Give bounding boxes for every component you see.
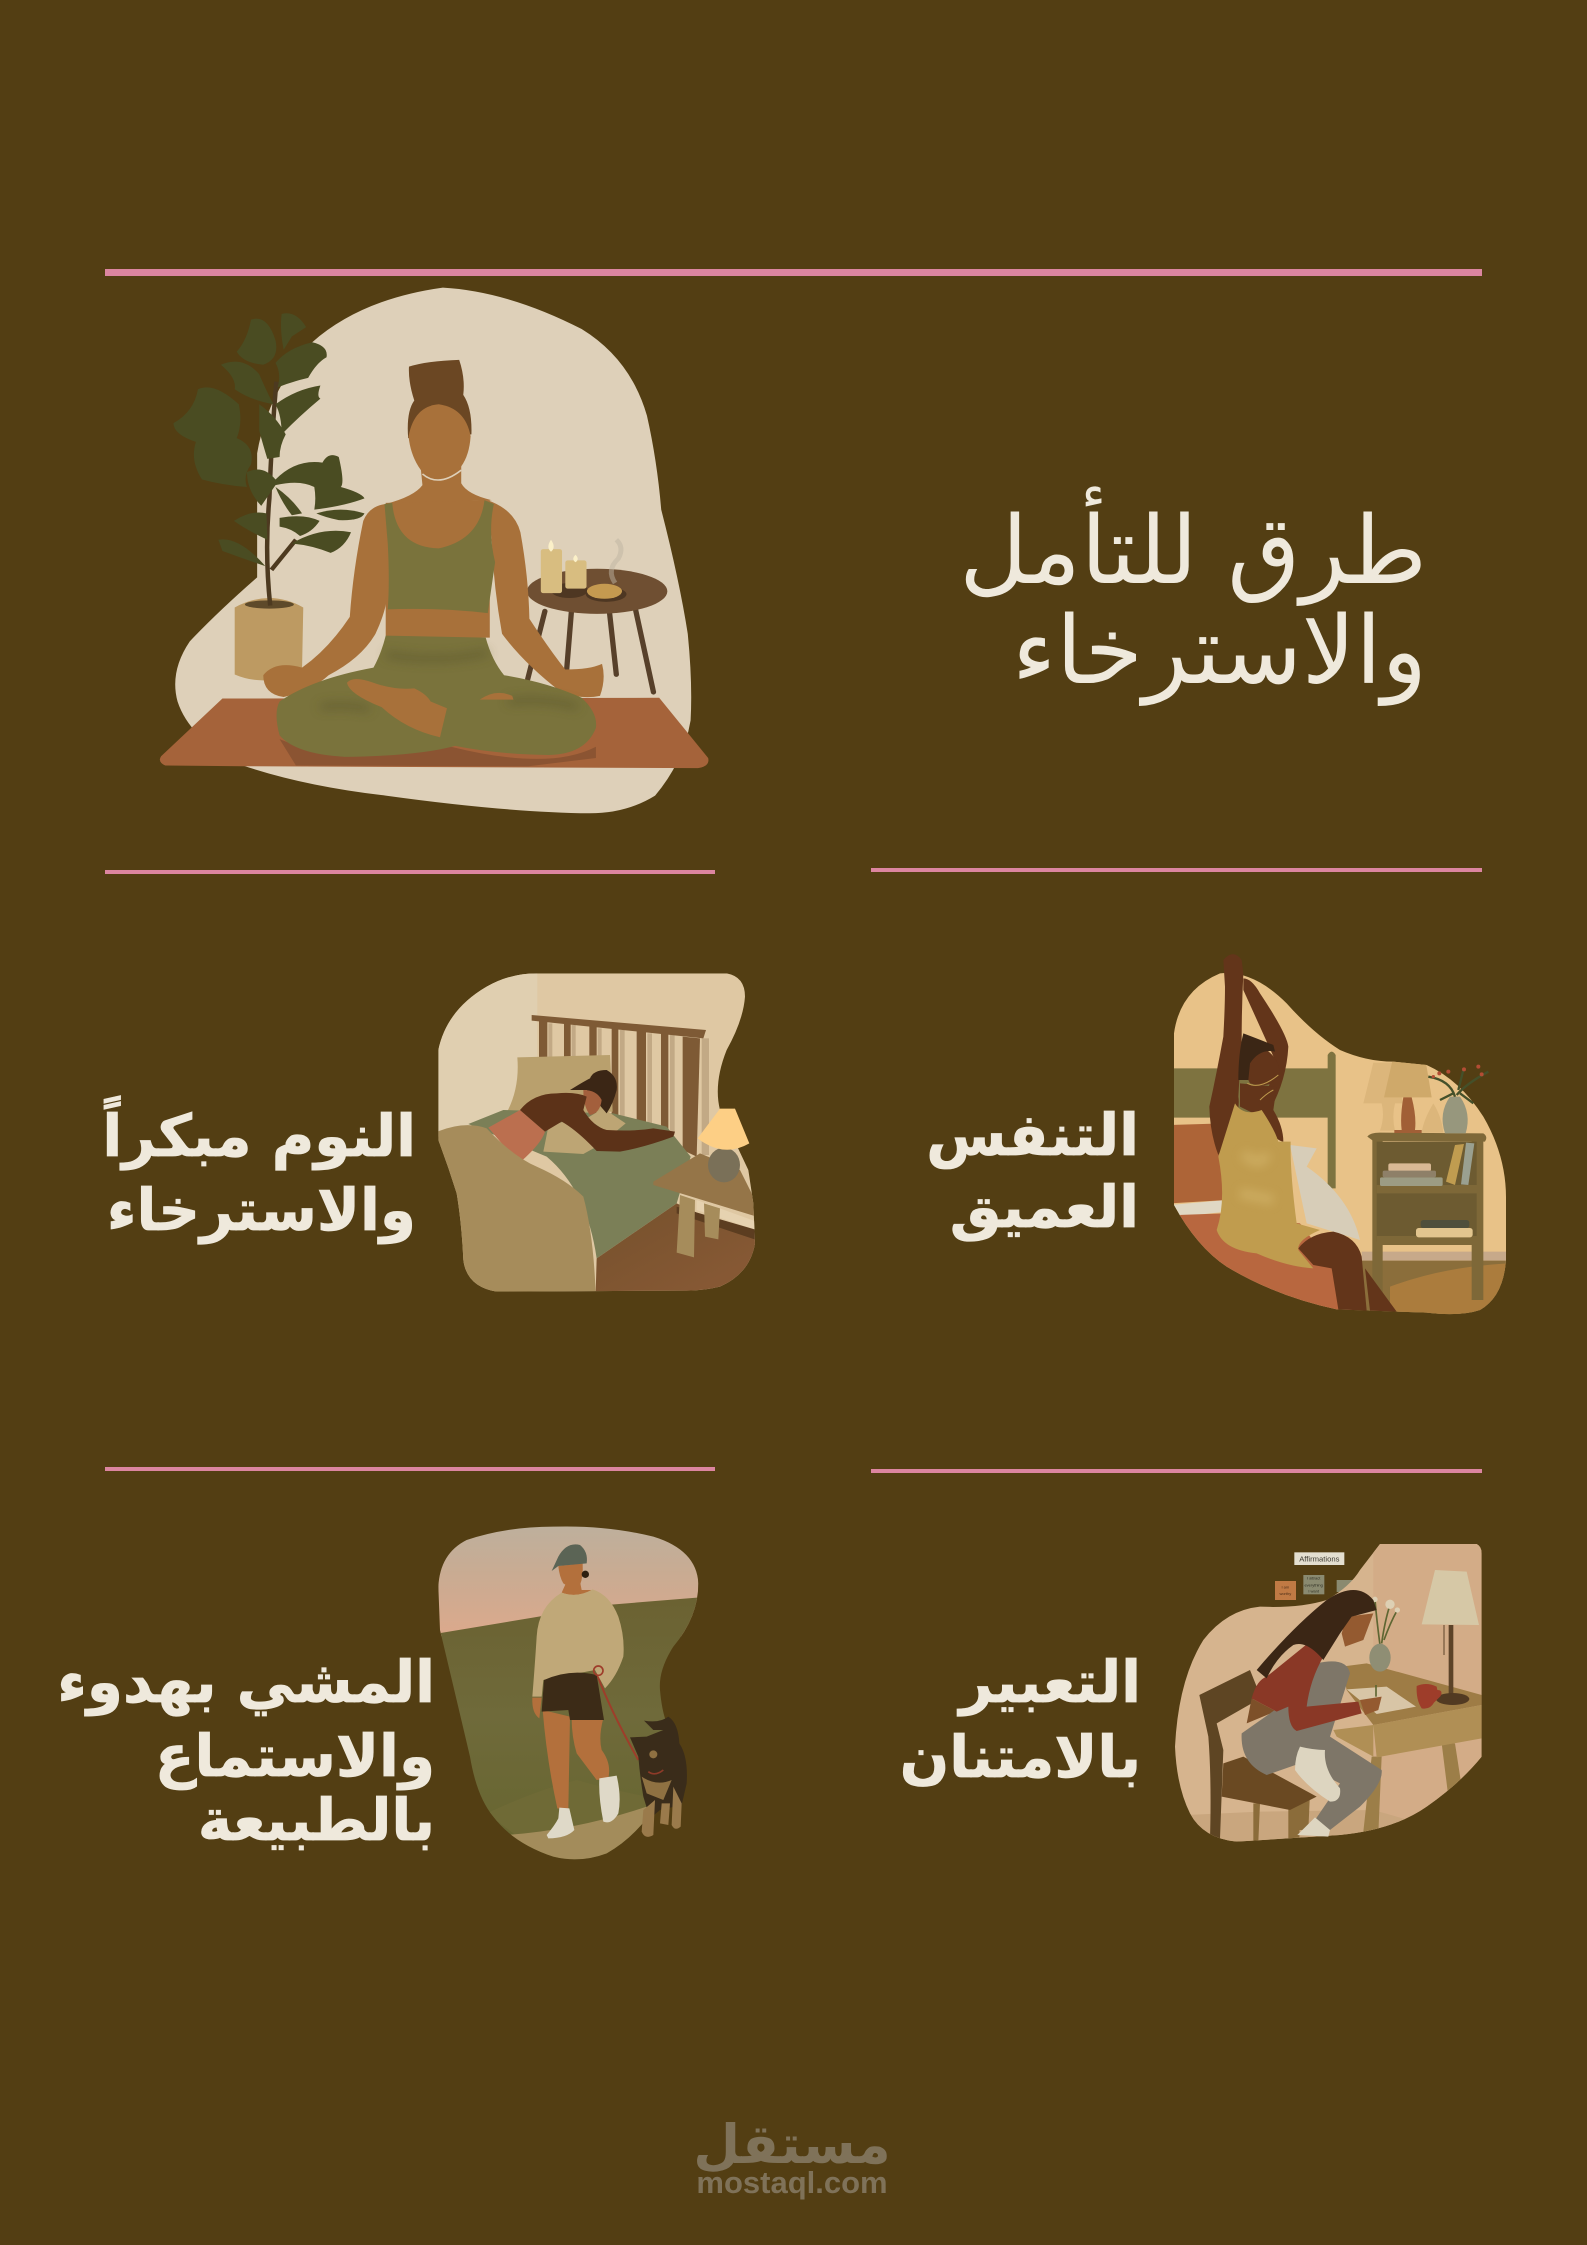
clipped bedroom scene xyxy=(1170,967,1510,1320)
top divider xyxy=(105,269,1482,276)
logo latin: mostaql.com xyxy=(696,2165,888,2200)
affirmations sign: Affirmations xyxy=(1299,1554,1340,1563)
divider: row 2 left xyxy=(105,870,715,874)
lamp xyxy=(698,1109,749,1182)
bed xyxy=(1174,1124,1222,1204)
logo arabic: مستقل xyxy=(693,2113,891,2176)
table lamp xyxy=(1384,1062,1432,1098)
face xyxy=(583,1090,602,1115)
leash xyxy=(597,1673,638,1760)
journaling woman xyxy=(1242,1590,1382,1837)
label: deep breathing xyxy=(926,1101,1139,1242)
open journal xyxy=(1347,1687,1416,1714)
camisole xyxy=(488,1110,545,1162)
clipped room scene xyxy=(1170,1540,1487,1850)
sticky notes: everything xyxy=(1304,1582,1323,1587)
plant pot xyxy=(235,598,303,680)
mostaql logo xyxy=(693,2113,891,2200)
line 1: التعبير xyxy=(956,1648,1141,1717)
table lamp shadow xyxy=(1363,1063,1443,1133)
small pillow xyxy=(588,1112,626,1130)
hair xyxy=(570,1070,617,1113)
affirmations sign xyxy=(1294,1552,1344,1565)
green sheet xyxy=(468,1110,691,1258)
illustration: woman journaling at desk xyxy=(1170,1540,1487,1850)
sticky notes: worthy xyxy=(1279,1591,1291,1596)
clipped landscape xyxy=(433,1523,703,1863)
line 2: والاسترخاء xyxy=(107,1176,416,1245)
line 1: التنفس xyxy=(926,1101,1139,1169)
headboard xyxy=(1170,1052,1336,1188)
vase xyxy=(1443,1097,1468,1133)
illustration: woman sleeping in bed xyxy=(433,970,760,1297)
line 2: العميق xyxy=(950,1173,1139,1242)
sticky notes xyxy=(1275,1575,1358,1600)
desk xyxy=(1363,1743,1462,1833)
illustration: woman stretching xyxy=(1170,954,1510,1320)
flowers xyxy=(1428,1065,1488,1103)
sticky notes: I am xyxy=(1281,1584,1290,1589)
front pillow xyxy=(543,1122,597,1154)
headboard xyxy=(532,1015,709,1157)
sticky notes: I want xyxy=(1308,1589,1320,1594)
title xyxy=(959,486,1427,706)
label: sleeping xyxy=(102,1095,416,1245)
divider: row 3 left xyxy=(105,1467,715,1471)
illustration: woman walking dog xyxy=(433,1523,703,1863)
mug xyxy=(1417,1684,1441,1709)
vase with daisies xyxy=(1369,1597,1400,1672)
clipped bedroom scene xyxy=(433,970,760,1297)
blanket xyxy=(433,1125,596,1293)
yoga mat xyxy=(160,698,708,768)
title line 2: والاسترخاء xyxy=(1012,597,1427,706)
side table with candles xyxy=(527,540,667,692)
nightstand with books xyxy=(1367,1133,1486,1300)
floor and baseboard xyxy=(596,1203,757,1293)
bedside table xyxy=(677,1195,720,1257)
back pillow xyxy=(505,1055,613,1116)
chair xyxy=(1253,1800,1310,1840)
line 3: بالطبيعة xyxy=(198,1786,435,1854)
title line 1: طرق للتأمل xyxy=(959,486,1427,606)
dog xyxy=(630,1717,687,1837)
torso and arm xyxy=(520,1093,675,1152)
illustration: meditating woman xyxy=(160,288,708,813)
label: walking xyxy=(57,1648,435,1854)
line 1: النوم مبكراً xyxy=(102,1095,416,1171)
line 2: والاستماع xyxy=(155,1722,435,1791)
divider: row 3 right xyxy=(871,1469,1482,1473)
line 2: بالامتنان xyxy=(900,1723,1141,1791)
line 1: المشي بهدوء xyxy=(57,1648,435,1717)
woman figure xyxy=(263,360,604,757)
fiddle leaf plant xyxy=(173,313,364,606)
walking woman xyxy=(532,1544,624,1838)
desk lamp xyxy=(1422,1570,1479,1705)
divider: row 2 right xyxy=(871,868,1482,872)
stretching woman xyxy=(1209,954,1397,1312)
sticky notes: I attract xyxy=(1307,1576,1321,1581)
floor and baseboard xyxy=(1362,1252,1508,1261)
label: gratitude xyxy=(900,1648,1141,1791)
cream blob background xyxy=(175,288,691,813)
